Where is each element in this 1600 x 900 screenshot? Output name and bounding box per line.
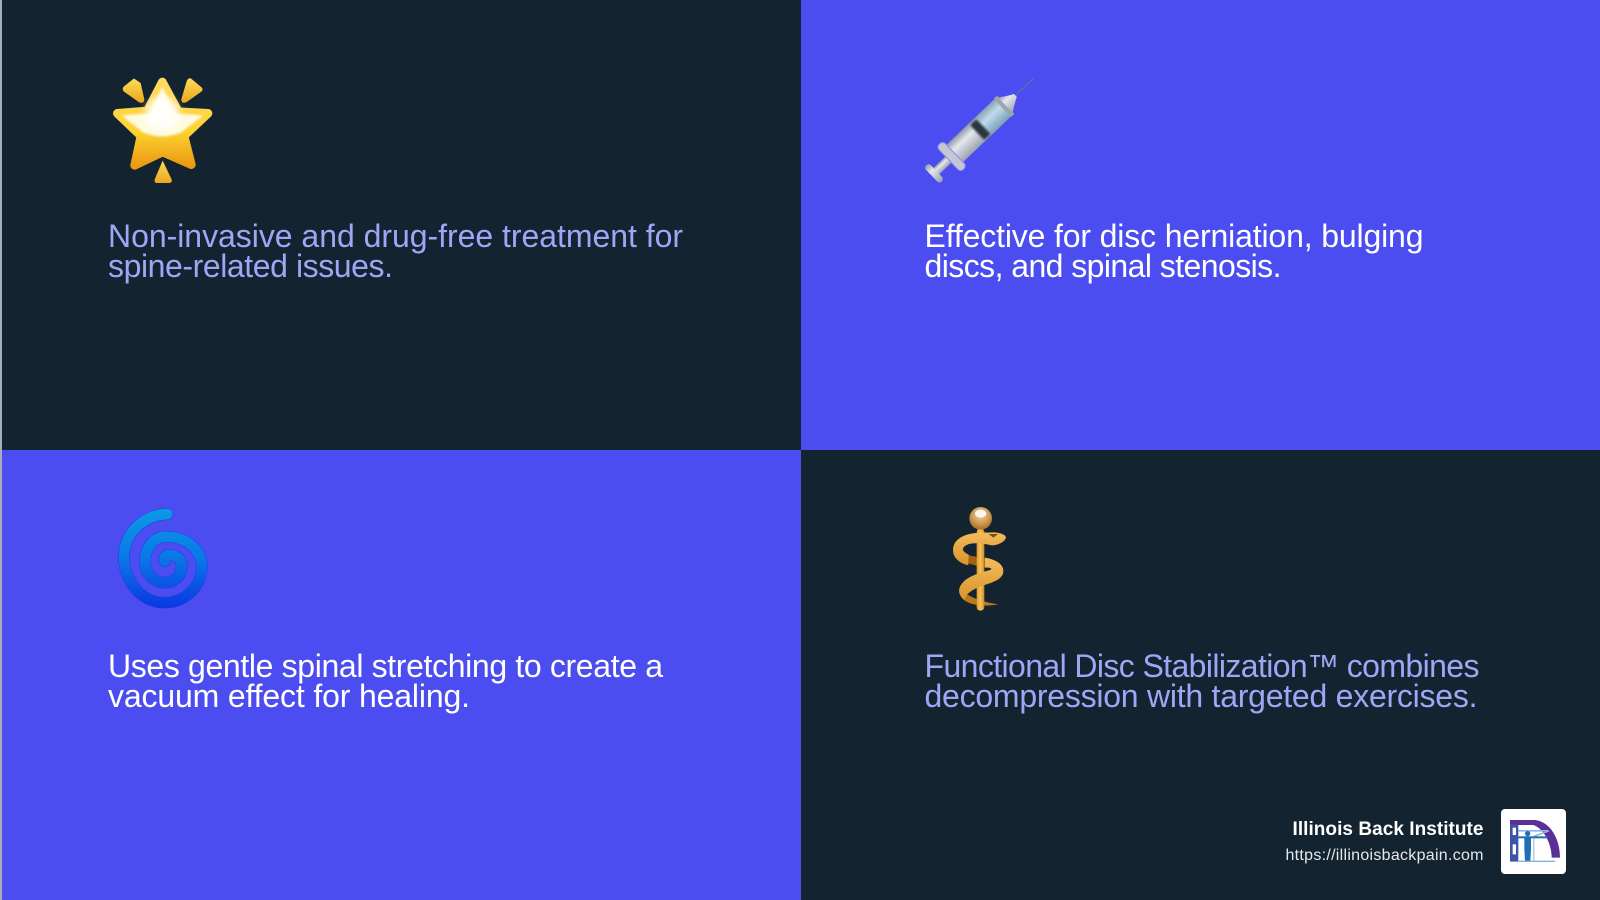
panel: non-invasive treatment bbox=[2, 0, 801, 450]
text: stabilization: decompression with targeted exercises. bbox=[924, 678, 1478, 714]
icon: spiral bbox=[124, 514, 202, 603]
text: effective: Effective for disc herniation, bulging bbox=[924, 218, 1424, 254]
icon: rod of asclepius bbox=[953, 507, 1006, 611]
text: non-invasive: Non-invasive and drug-free treatment for bbox=[108, 218, 683, 254]
text: effective: discs, and spinal stenosis. bbox=[924, 248, 1282, 284]
text: non-invasive: spine-related issues. bbox=[108, 248, 393, 284]
icon: glowing star bbox=[117, 79, 208, 183]
brand url: https://illinoisbackpain.com bbox=[1286, 847, 1484, 864]
icon: syringe bbox=[920, 66, 1046, 188]
panel: functional disc stabilization bbox=[801, 450, 1600, 900]
brand name: Illinois Back Institute bbox=[1292, 819, 1484, 840]
panel: spinal stretching bbox=[2, 450, 801, 900]
text: stabilization: Functional Disc Stabilization™ combines bbox=[924, 648, 1480, 684]
logo bbox=[1501, 809, 1566, 874]
text: stretching: Uses gentle spinal stretching to create a bbox=[108, 648, 663, 684]
text: stretching: vacuum effect for healing. bbox=[108, 678, 470, 714]
background edge strip bbox=[0, 0, 2, 900]
footer: brand bbox=[1286, 809, 1566, 874]
panel: effective conditions bbox=[801, 0, 1600, 450]
